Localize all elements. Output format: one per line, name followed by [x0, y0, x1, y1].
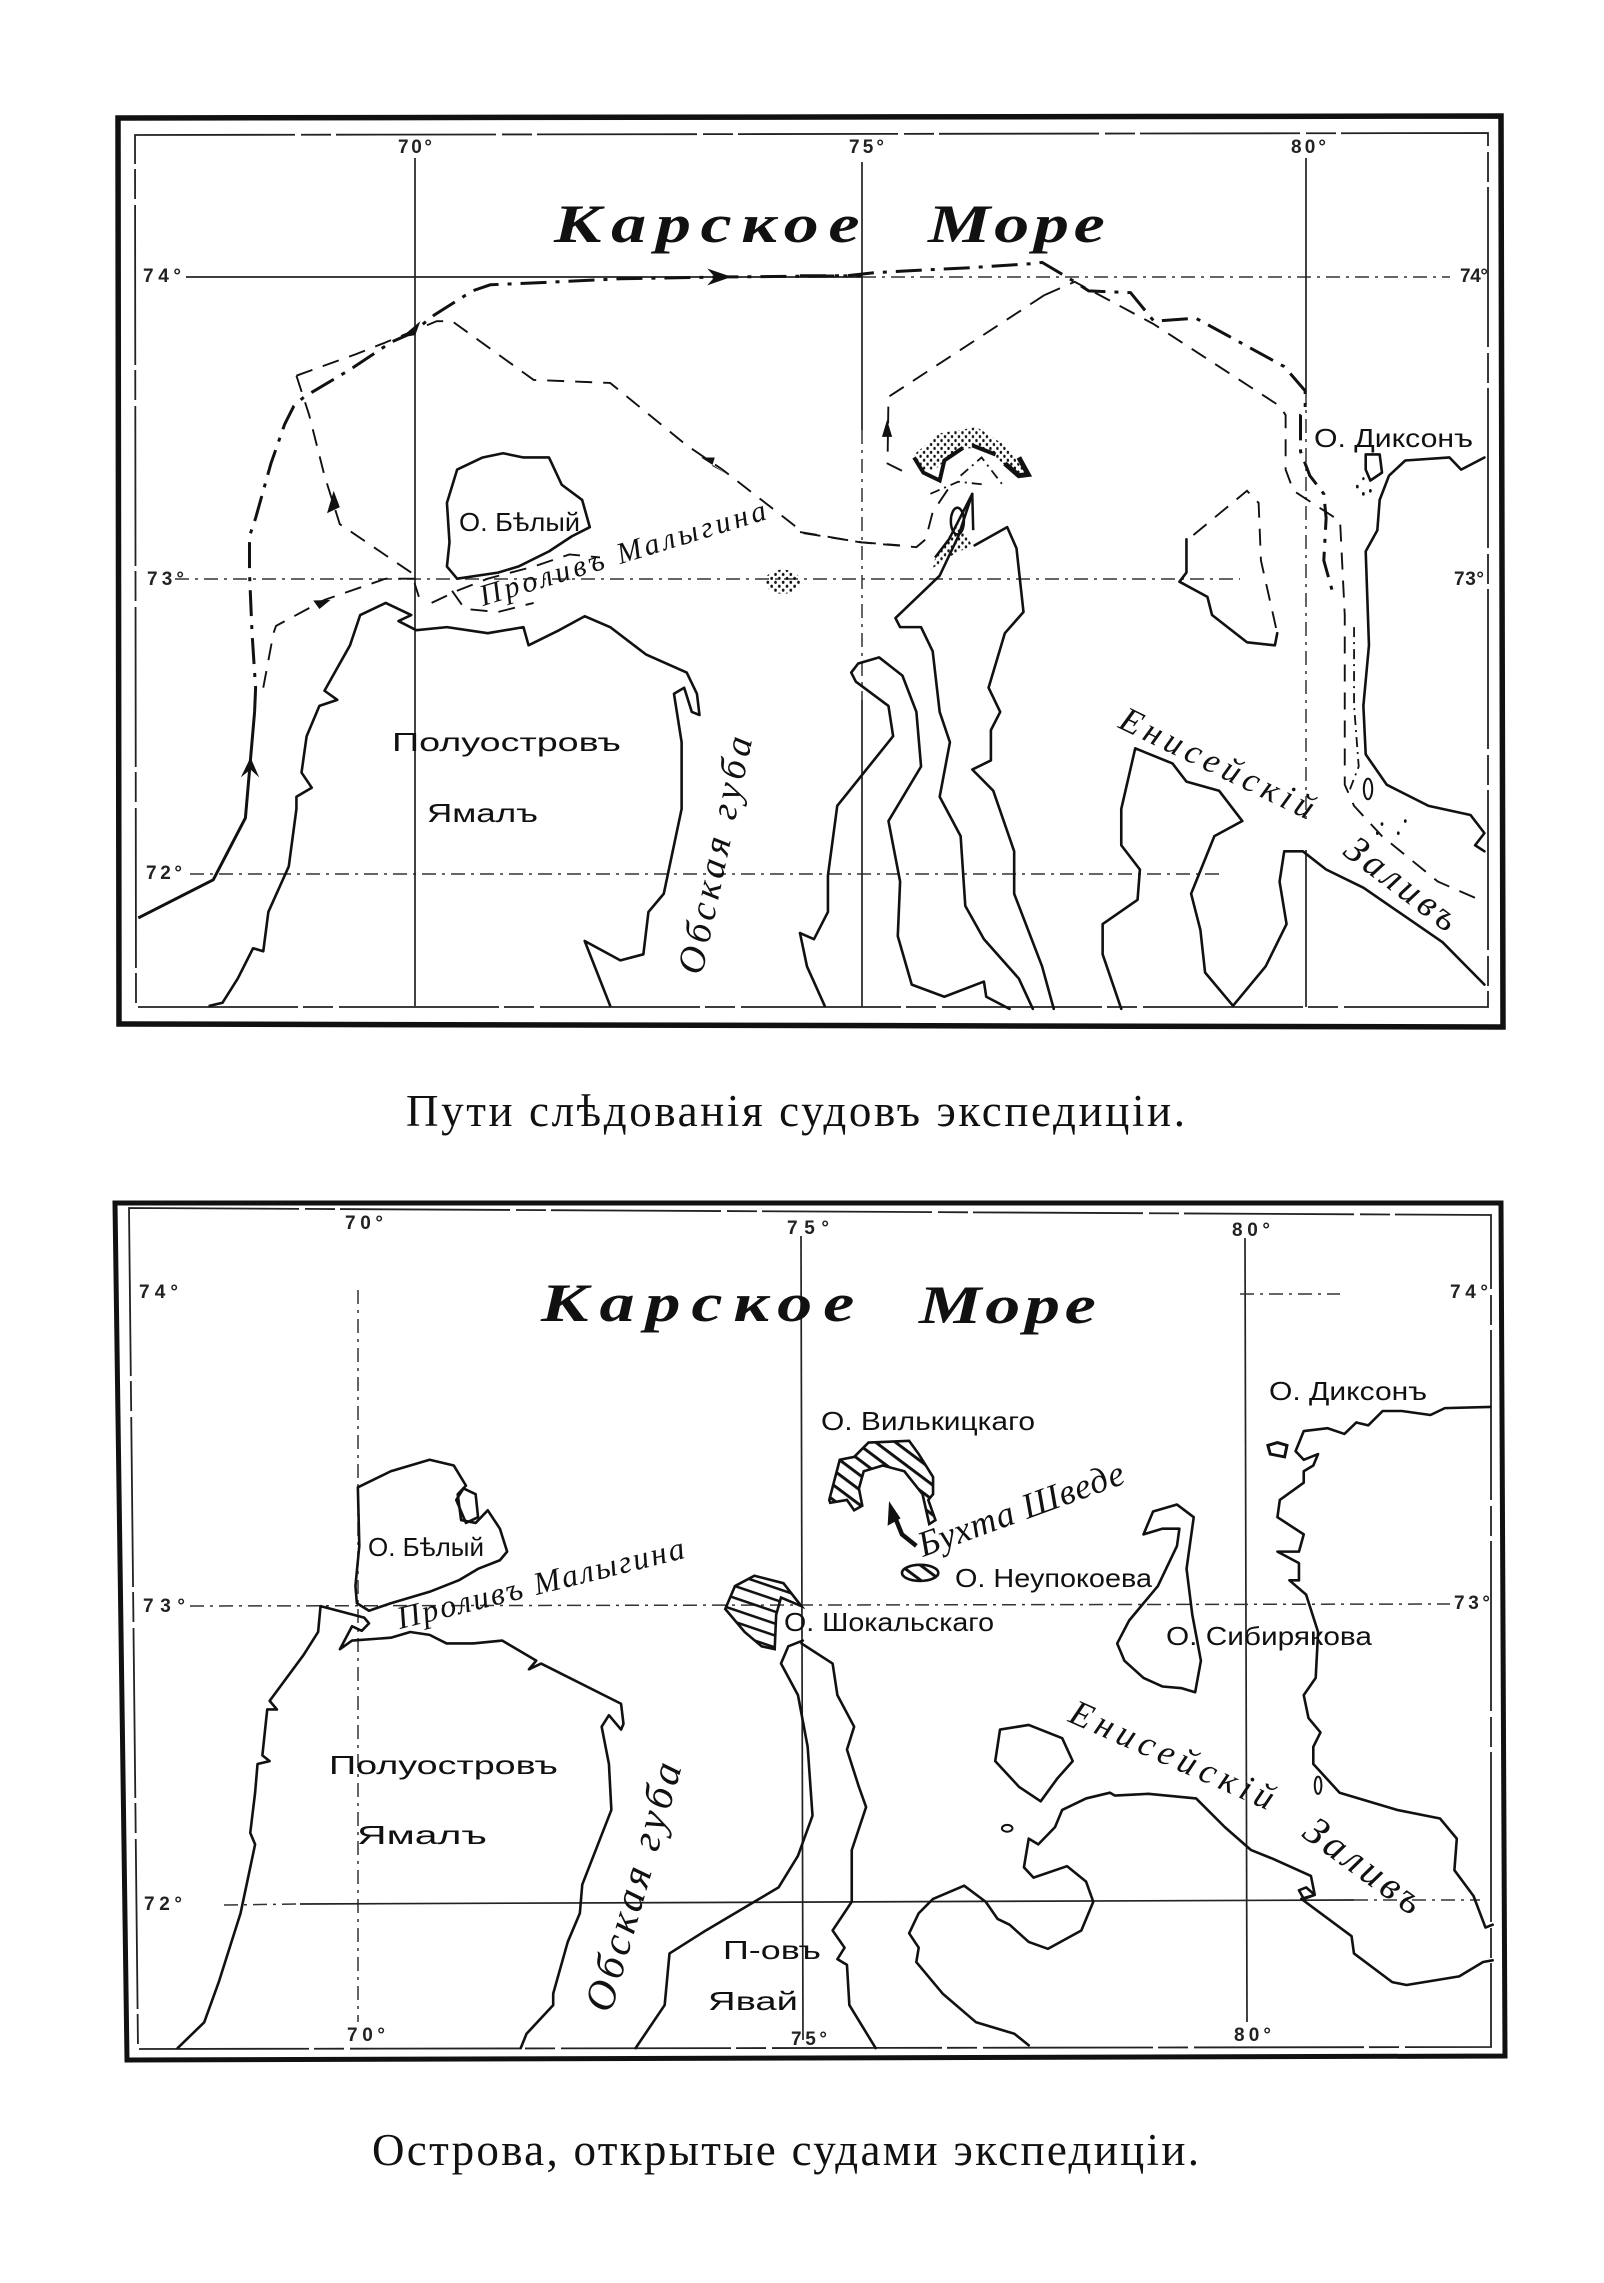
- arrows on route: [241, 268, 732, 777]
- coast: Yenisei gulf west: [1103, 748, 1484, 1009]
- place labels: Заливъ: [1337, 828, 1466, 940]
- degree labels: 73°: [1454, 1593, 1490, 1614]
- left half of lower map drawing: [178, 1460, 813, 2048]
- degree labels: 70°: [345, 1213, 383, 1234]
- graticule: [190, 1236, 1480, 2040]
- title: Kara Sea: Море: [927, 194, 1105, 254]
- map frame: [115, 1203, 1505, 2060]
- coast: Gydan tip peninsula: [895, 494, 1033, 1009]
- coast: Gydan and south shore of Yenisei gulf: [909, 1793, 1493, 2045]
- panel: upper map, expedition routes: [118, 116, 1503, 1027]
- right half of upper map drawing: [800, 262, 1484, 1009]
- place labels: О. Шокальскаго: [784, 1607, 994, 1637]
- place labels: Явай: [708, 1986, 798, 2016]
- degree labels: 72°: [144, 1894, 182, 1915]
- place labels: Проливъ Малыгина: [392, 1529, 688, 1636]
- place labels: О. Диксонъ: [1269, 1376, 1427, 1406]
- degree labels: [139, 1213, 1490, 2050]
- island: Bely: [355, 1460, 507, 1611]
- island west of Yenisei gulf: [995, 1725, 1073, 1801]
- ship route: dashed tracks continued: [800, 488, 949, 547]
- coast: Yavai west shore: [800, 657, 1010, 1009]
- ship route: dashed tracks: [263, 579, 419, 688]
- place labels: О. Бѣлый: [368, 1532, 484, 1562]
- place labels: Бухта Шведе: [911, 1453, 1130, 1565]
- coast: east shore with Dikson: [1363, 457, 1484, 851]
- title: Kara Sea: Карское: [540, 1273, 854, 1333]
- island: Shokalsky, hatched: [725, 1576, 801, 1649]
- island: Sibiryakov, surveyed and dashed shore: [1179, 539, 1277, 645]
- right half of lower map drawing: [802, 1407, 1493, 2048]
- degree labels: 70°: [398, 137, 432, 158]
- degree labels: 80°: [1234, 2025, 1271, 2046]
- degree labels: 74°: [1450, 1282, 1488, 1303]
- degree labels: 75°: [791, 2029, 827, 2050]
- degree labels: 73°: [147, 569, 184, 590]
- degree labels: 74°: [1460, 266, 1488, 287]
- degree labels: 73°: [143, 1596, 185, 1617]
- map frame: [118, 116, 1503, 1027]
- place labels: О. Неупокоева: [955, 1563, 1153, 1593]
- degree labels: 74°: [139, 1282, 178, 1303]
- place labels: Ямалъ: [357, 1820, 487, 1850]
- island: Dikson: [1366, 454, 1382, 481]
- degree labels: 80°: [1232, 1220, 1270, 1241]
- degree labels: 74°: [143, 266, 181, 287]
- place labels: Обская губа: [576, 1757, 691, 2017]
- title: Kara Sea: [553, 194, 1105, 254]
- title: Kara Sea: Карское: [553, 194, 860, 254]
- panel: lower map, discovered islands: [115, 1203, 1505, 2060]
- islets: [1356, 477, 1407, 835]
- arrow to Shvede bay: [888, 1501, 916, 1546]
- route arrow: [882, 420, 892, 437]
- place labels: [392, 423, 1473, 978]
- coast: Yamal peninsula: [178, 1606, 623, 2048]
- place labels: Полуостровъ: [392, 727, 621, 757]
- island: Sibiryakov: [1117, 1505, 1201, 1692]
- place labels: Заливъ: [1296, 1807, 1432, 1923]
- place labels: Ямалъ: [427, 798, 538, 828]
- place labels: П-овъ: [723, 1935, 821, 1965]
- place labels: О. Диксонъ: [1314, 423, 1473, 453]
- title: Kara Sea: [540, 1273, 1096, 1335]
- islets: [1002, 1777, 1321, 1832]
- discovered ice arc with stipple: [914, 427, 1028, 570]
- coast: Yavai peninsula west: [636, 1641, 813, 2048]
- place labels: Енисейскiй: [1113, 699, 1322, 827]
- island: Vilkitsky, hatched: [829, 1441, 935, 1524]
- caption: lower map: Острова, открытые судами экспедиціи.: [372, 2125, 1199, 2175]
- caption: upper map: Пути слѣдованія судовъ экспедиціи.: [406, 1086, 1185, 1136]
- degree labels: 70°: [347, 2025, 385, 2046]
- place labels: Обская губа: [670, 732, 761, 978]
- degree labels: 75°: [787, 1218, 829, 1239]
- coast: Yavai peninsula east: [802, 1643, 876, 2048]
- degree labels: 80°: [1291, 137, 1326, 158]
- place labels: О. Бѣлый: [459, 507, 580, 537]
- place labels: Полуостровъ: [329, 1750, 558, 1780]
- place labels: О. Сибирякова: [1166, 1621, 1373, 1651]
- island: Dikson: [1268, 1443, 1287, 1457]
- place labels: [329, 1376, 1432, 2017]
- place labels: Проливъ Малыгина: [474, 494, 770, 613]
- ship route: main track continued: [800, 262, 1333, 594]
- title: Kara Sea: Море: [918, 1275, 1096, 1335]
- coast: east shore with Dikson: [1277, 1407, 1493, 1928]
- stippled shoal: [765, 570, 801, 594]
- left half of upper map drawing: [138, 268, 900, 1006]
- place labels: Енисейскiй: [1063, 1691, 1281, 1818]
- place labels: О. Вилькицкаго: [821, 1406, 1035, 1436]
- island: Neupokoev: [902, 1565, 938, 1581]
- degree labels: 75°: [849, 137, 884, 158]
- degree labels: 72°: [146, 863, 182, 884]
- coast: Yamal peninsula: [210, 603, 699, 1006]
- graticule: [175, 158, 1450, 1007]
- island: Bely: [447, 453, 590, 579]
- ship route: main track: [138, 712, 255, 918]
- degree labels: [143, 137, 1488, 884]
- degree labels: 73°: [1454, 569, 1484, 590]
